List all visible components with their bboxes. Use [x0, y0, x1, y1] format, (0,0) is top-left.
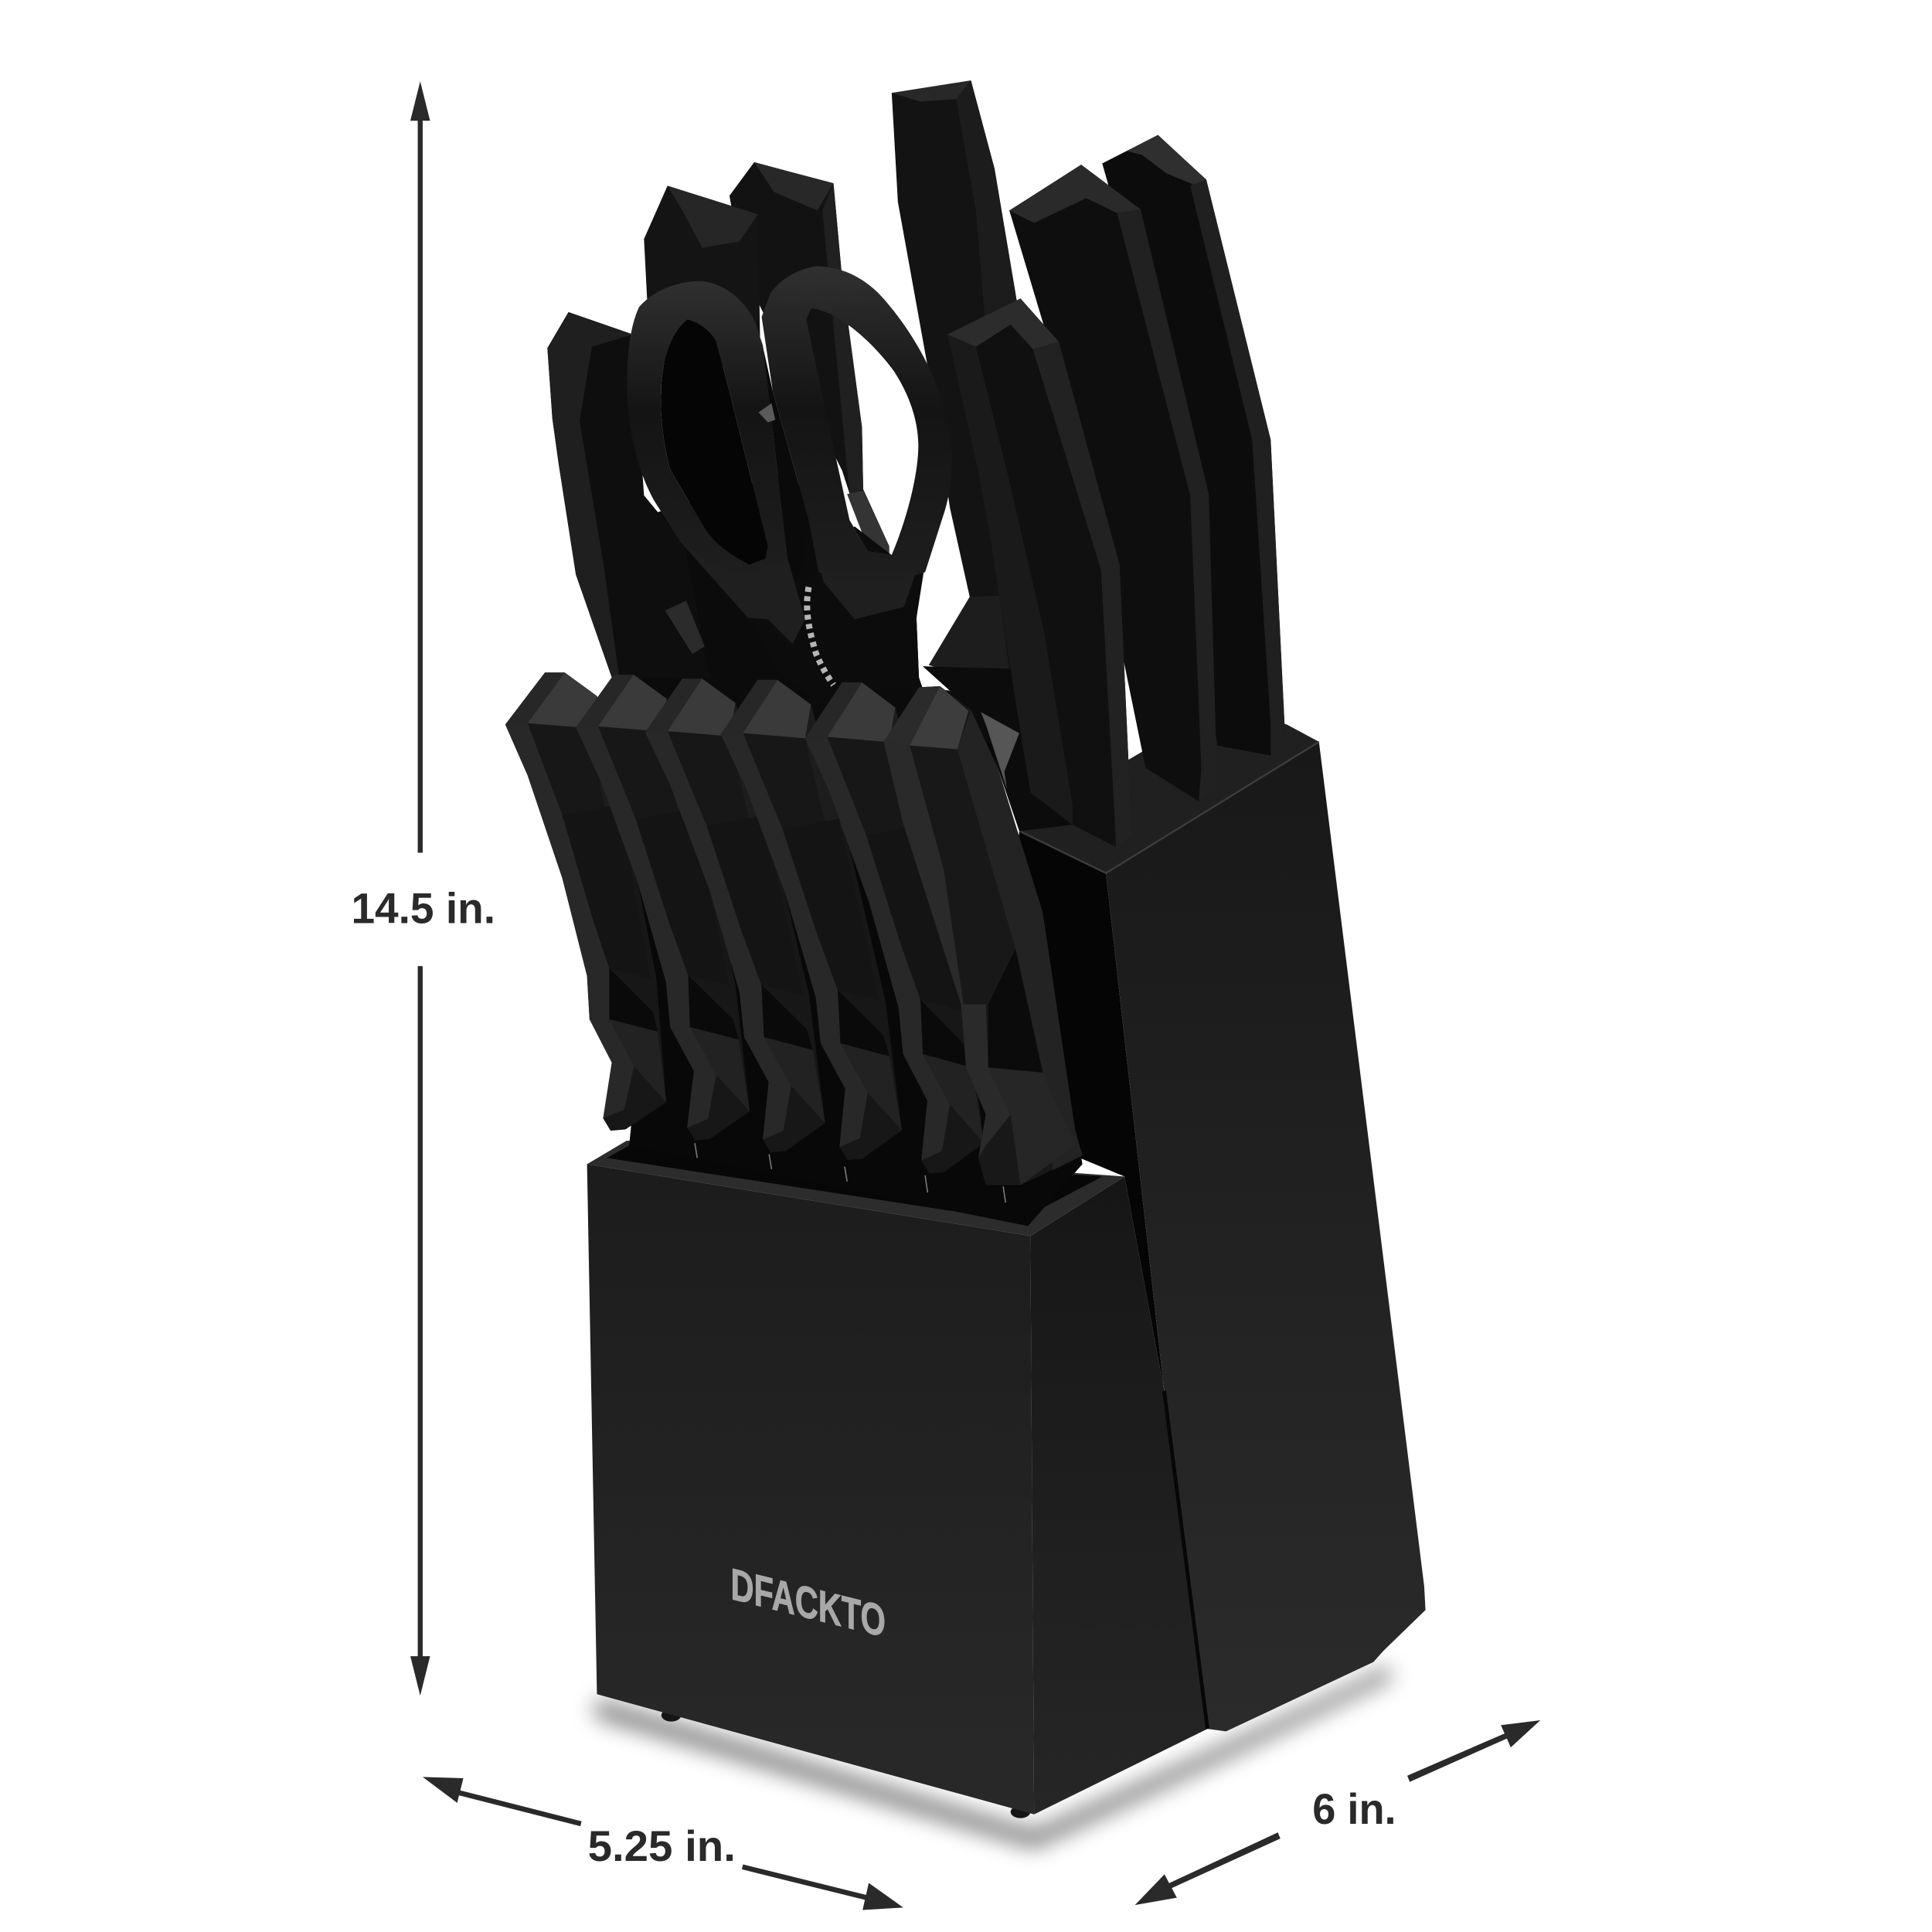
blade slivers in slots: [695, 1143, 1005, 1202]
width dimension arrow: [423, 1777, 903, 1910]
steak knife 4: [718, 680, 903, 1160]
dark region behind right knives: [923, 666, 1073, 831]
knife: front right: [947, 298, 1132, 847]
groove between blocks: [1164, 1391, 1207, 1729]
steak knife 2: [574, 675, 750, 1140]
rear block right face: [1106, 742, 1426, 1731]
scissors gap between handles: [763, 347, 808, 582]
knife: far back left: [730, 162, 889, 555]
logo: DFACKTO: [731, 1560, 886, 1647]
knife: left: [547, 312, 709, 679]
scissors left handle: [628, 281, 787, 572]
knife slot area: [607, 1145, 1102, 1221]
scissors pivot and blades: [680, 526, 924, 709]
height label: 14.5 in.: [351, 883, 495, 932]
front block top surface: [587, 1141, 1124, 1236]
dark backdrop behind scissors and knife caps: [612, 471, 991, 768]
scissors right arm: [808, 520, 925, 619]
front block side face: [1030, 1176, 1207, 1815]
scissors pin: [759, 403, 775, 422]
scissors left arm: [680, 530, 805, 644]
depth dimension arrow: [1135, 1720, 1540, 1905]
steak knife 3: [643, 679, 827, 1152]
knife: back left second: [644, 185, 760, 372]
steak knife 1: [505, 672, 666, 1131]
knife: back right: [1102, 135, 1285, 756]
front block front face: [587, 1164, 1034, 1815]
dark fill between steak knives: [619, 743, 1083, 1226]
knife: middle right: [1009, 165, 1217, 801]
knife block: [587, 706, 1426, 1818]
steak knife 6: [883, 686, 1083, 1185]
rear block top surface: [1019, 706, 1319, 873]
width label: 5.25 in.: [588, 1821, 736, 1870]
steak knife 5: [802, 682, 985, 1174]
scissors serrated edge: [807, 587, 834, 685]
height dimension arrow: [410, 81, 430, 1696]
depth label: 6 in.: [1312, 1784, 1396, 1833]
rear block top rim: [1019, 742, 1319, 873]
scissors right handle: [762, 267, 952, 582]
block feet: [662, 1709, 1030, 1818]
rear block left dark face: [1009, 831, 1164, 1391]
shadow under block: [594, 1665, 1393, 1848]
blade glint behind front steak knife: [981, 712, 1019, 789]
scissors left hole: [661, 319, 768, 565]
knife: tall centre: [892, 80, 1028, 689]
scissors: [628, 267, 952, 709]
